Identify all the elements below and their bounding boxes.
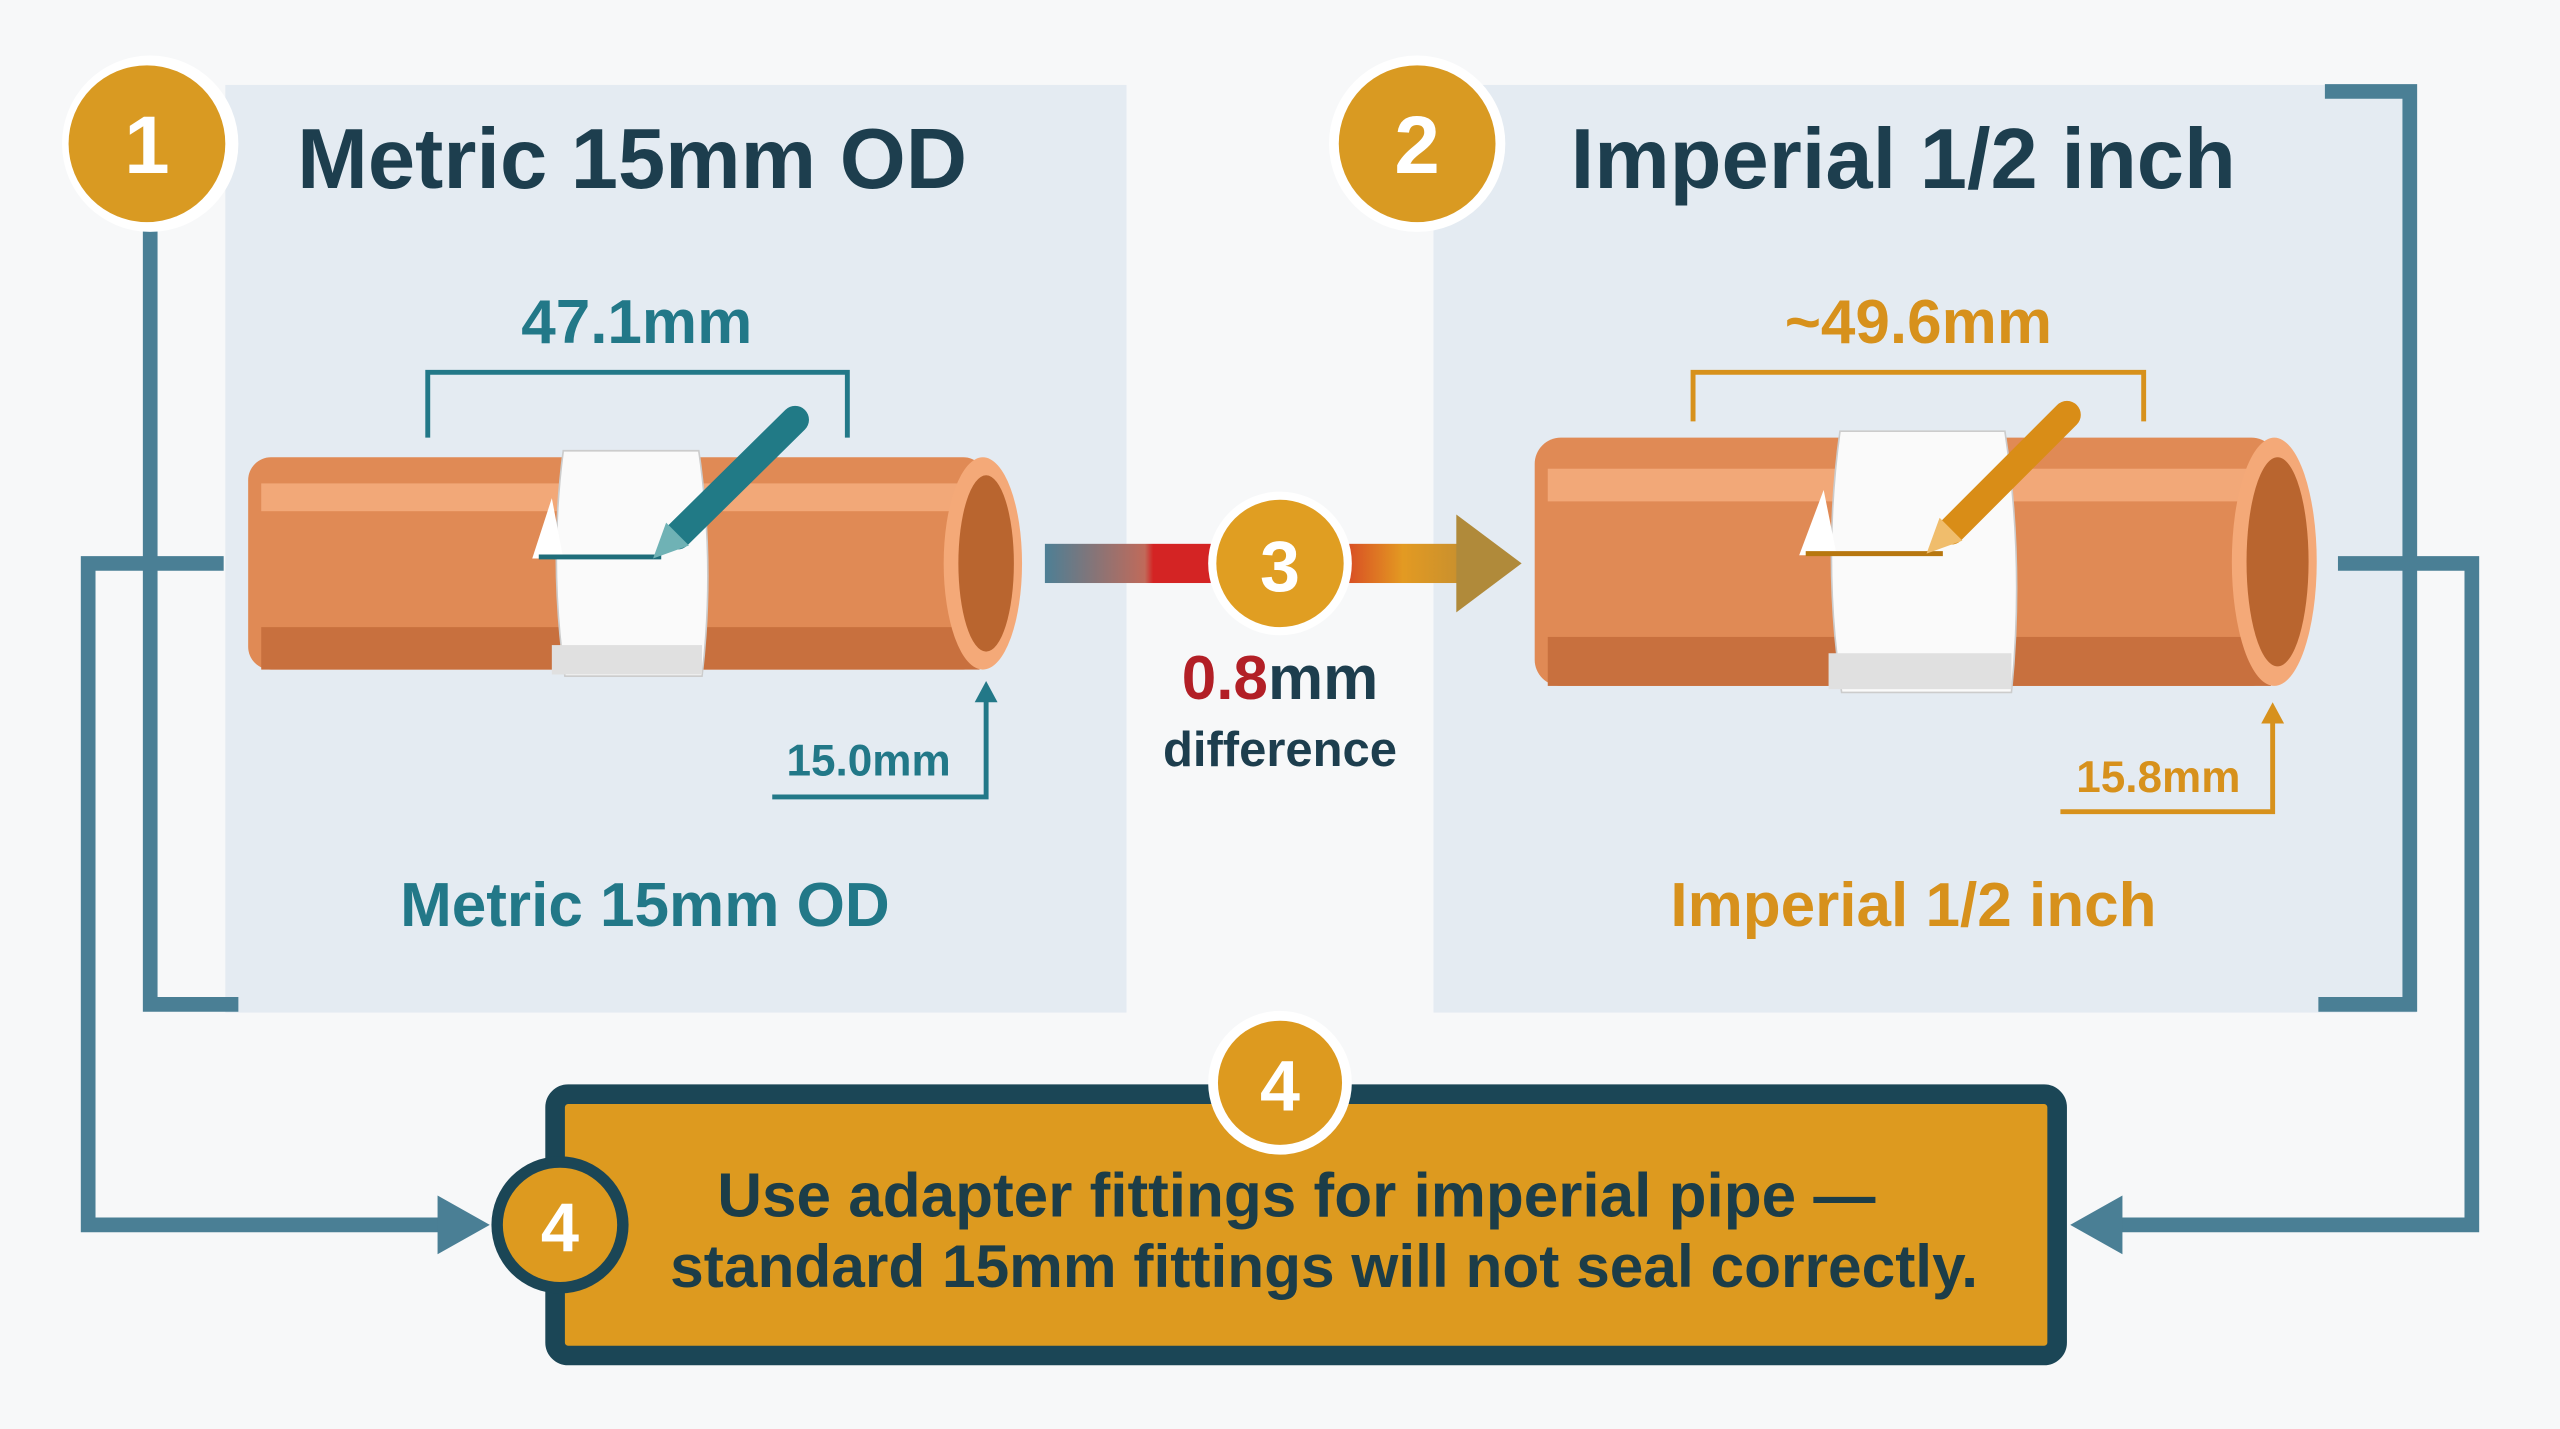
text: 0.8mm difference <box>1163 644 1397 777</box>
measurement: OD 15.8mm: 15.8mm <box>2076 753 2240 802</box>
pipe: metric copper pipe <box>248 420 1022 676</box>
badge 4 left: 4 <box>541 1189 579 1266</box>
measurement: circumference ~49.6mm: ~49.6mm <box>1785 288 2052 357</box>
tape band <box>556 451 708 676</box>
badge 2 <box>1329 56 1505 232</box>
arrow: left into box <box>438 1195 490 1254</box>
connector lines: left <box>88 229 449 1225</box>
text: advice: Use adapter fittings for imperial pipe — <box>717 1162 1876 1231</box>
badge 4 top <box>1208 1011 1352 1155</box>
icon: pencil orange <box>1927 415 2067 554</box>
arrow: right into box <box>2070 1195 2122 1254</box>
text: 0.8mm difference: 0.8mm <box>1182 644 1378 713</box>
connector lines: right <box>2114 91 2472 1225</box>
measurement: OD 15.0mm <box>772 681 998 797</box>
icon: pencil <box>653 420 795 559</box>
badge 2: 2 <box>1394 100 1440 191</box>
badge 4 left <box>491 1156 629 1293</box>
badge 1: 1 <box>124 100 170 191</box>
badge 4 top: 4 <box>1260 1047 1300 1127</box>
label: imperial bottom: Imperial 1/2 inch <box>1670 871 2157 940</box>
pipe: imperial copper pipe <box>1535 415 2317 692</box>
panel: imperial <box>1433 85 2416 1013</box>
measurement: circumference ~49.6mm <box>1693 288 2144 421</box>
heading: imperial title: Imperial 1/2 inch <box>1571 111 2236 206</box>
measurement: circumference 47.1mm <box>428 288 847 438</box>
text: 0.8mm difference: difference <box>1163 723 1397 777</box>
label: metric bottom: Metric 15mm OD <box>400 871 890 940</box>
measurement: OD 15.0mm: 15.0mm <box>786 737 951 786</box>
callout box: recommendation: standard 15mm fittings will not seal correctly. <box>670 1232 1978 1300</box>
measurement: circumference 47.1mm: 47.1mm <box>521 288 752 357</box>
tape band <box>1831 431 2017 692</box>
arrow: difference gradient <box>1045 514 1522 612</box>
badge 1 <box>62 56 238 232</box>
callout box: recommendation <box>555 1094 2057 1356</box>
badge 3 <box>1208 492 1352 635</box>
measurement: OD 15.8mm <box>2060 702 2284 812</box>
heading: metric title: Metric 15mm OD <box>297 111 967 206</box>
panel: metric <box>225 85 1127 1013</box>
badge 3: 3 <box>1260 527 1300 607</box>
